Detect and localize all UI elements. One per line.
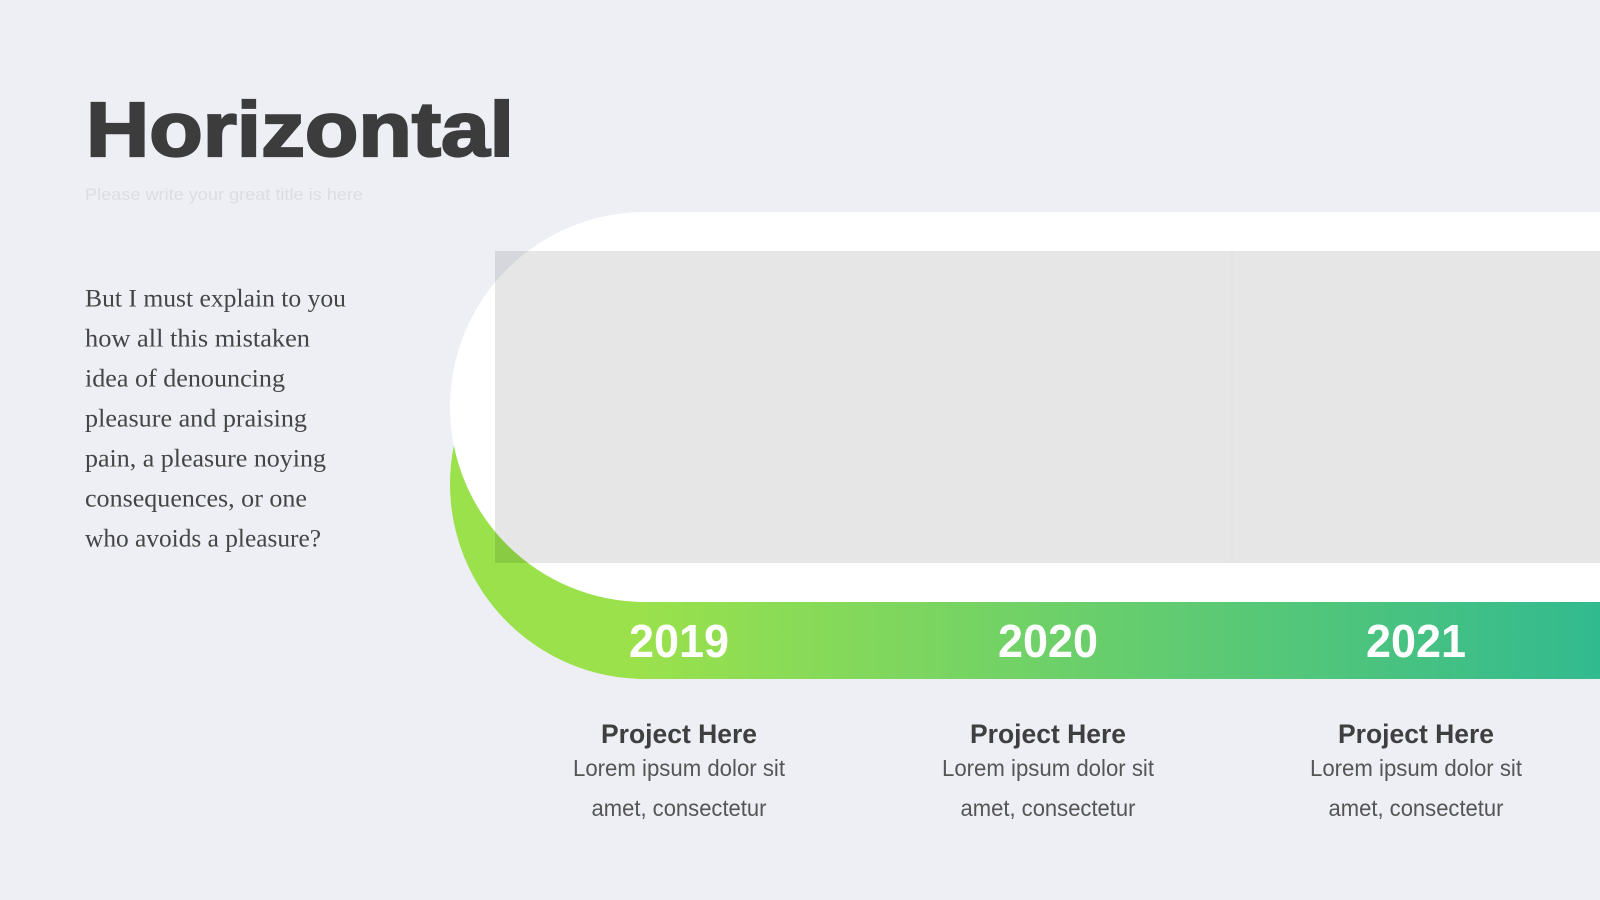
title: Horizontal bbox=[86, 87, 514, 173]
project 2019 bbox=[573, 719, 786, 821]
body paragraph: pleasure and praising bbox=[85, 406, 308, 432]
project 2021: Project Here bbox=[1338, 719, 1494, 749]
year labels bbox=[629, 615, 1466, 667]
project 2020: Lorem ipsum dolor sit bbox=[942, 755, 1155, 781]
body paragraph: how all this mistaken bbox=[85, 326, 311, 352]
project 2021 bbox=[1310, 719, 1523, 821]
project 2020 bbox=[942, 719, 1155, 821]
year labels: 2021 bbox=[1366, 615, 1466, 667]
body paragraph: pain, a pleasure noying bbox=[85, 446, 327, 472]
white rounded panel bbox=[450, 212, 1600, 602]
project 2019: Lorem ipsum dolor sit bbox=[573, 755, 786, 781]
year labels: 2020 bbox=[998, 615, 1098, 667]
project 2019: Project Here bbox=[601, 719, 757, 749]
project 2021: Lorem ipsum dolor sit bbox=[1310, 755, 1523, 781]
project 2021: amet, consectetur bbox=[1328, 795, 1504, 821]
body paragraph bbox=[85, 286, 346, 552]
body paragraph: But I must explain to you bbox=[85, 286, 346, 312]
body paragraph: idea of denouncing bbox=[85, 366, 286, 392]
body paragraph: consequences, or one bbox=[85, 486, 307, 512]
project 2020: amet, consectetur bbox=[960, 795, 1136, 821]
year labels: 2019 bbox=[629, 615, 729, 667]
subtitle: Please write your great title is here bbox=[85, 185, 363, 204]
timeline green gradient band bbox=[450, 289, 1600, 679]
project 2020: Project Here bbox=[970, 719, 1126, 749]
image placeholder bbox=[495, 251, 1600, 563]
body paragraph: who avoids a pleasure? bbox=[85, 526, 321, 552]
project 2019: amet, consectetur bbox=[592, 795, 767, 821]
